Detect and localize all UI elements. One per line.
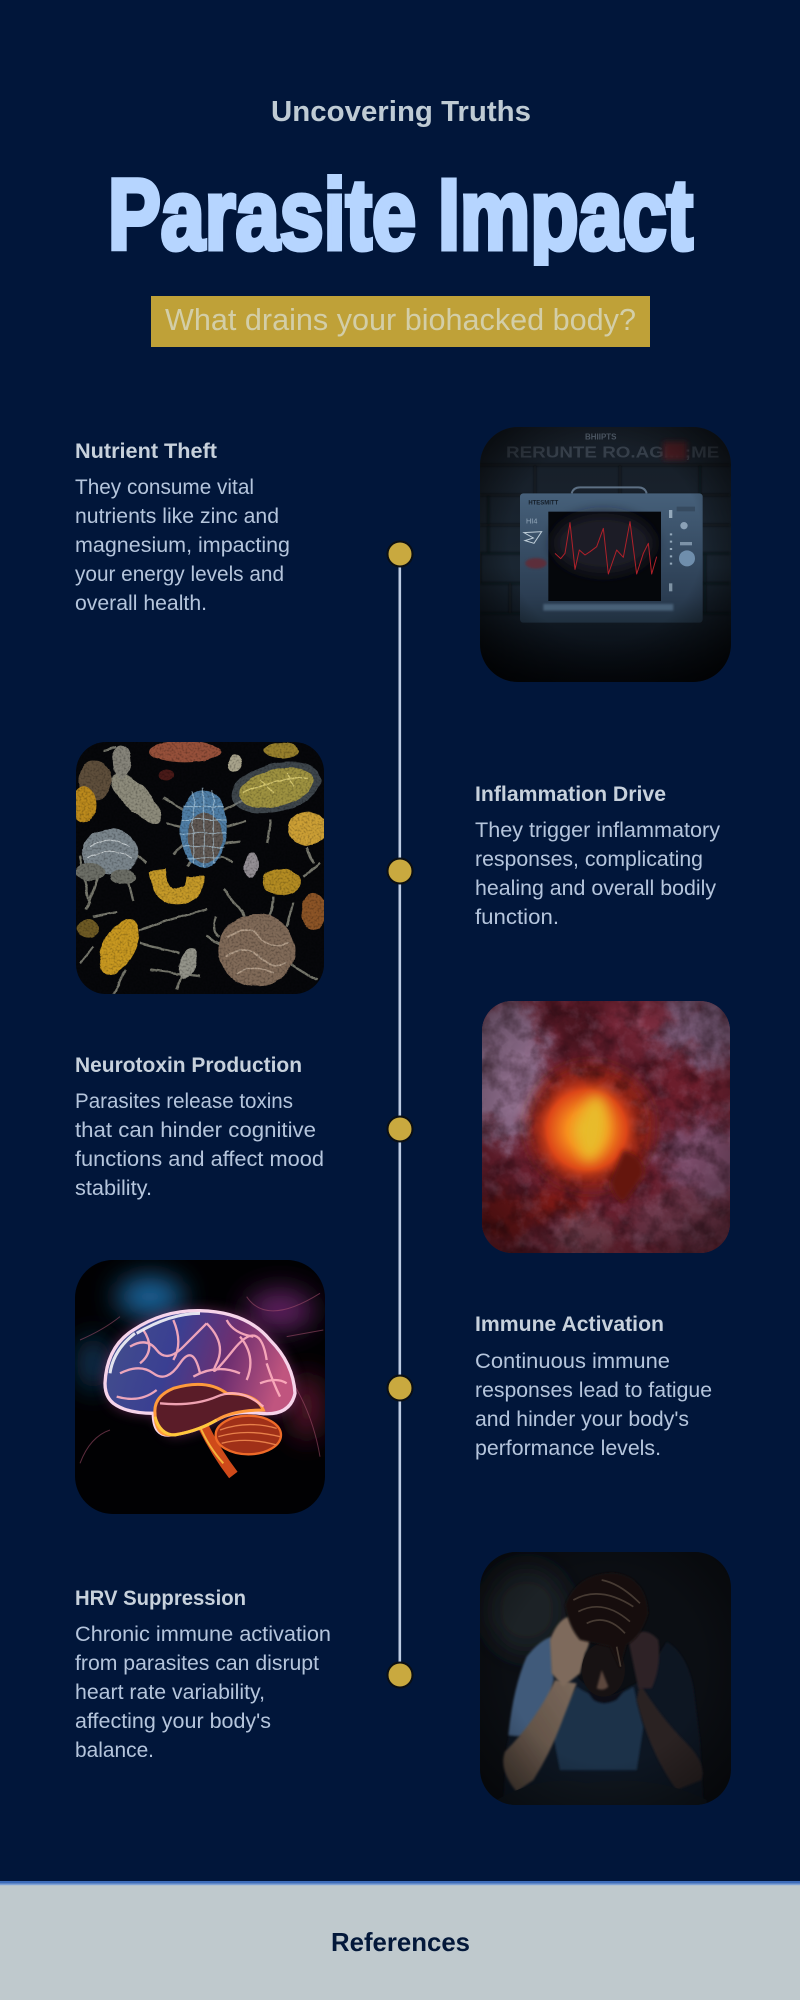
text block: Nutrient Theft: Nutrient Theft <box>75 440 217 463</box>
text block: HRV Suppression: affecting your body's <box>75 1710 271 1733</box>
eyebrow heading: Uncovering Truths <box>271 96 531 128</box>
timeline dot 2 <box>388 858 412 884</box>
cerebellum <box>216 1416 281 1454</box>
text block: Immune Activation: performance levels. <box>475 1437 661 1460</box>
text block: Neurotoxin Production: that can hinder cognitive <box>75 1119 316 1142</box>
dark folds <box>610 1150 644 1203</box>
text block: Neurotoxin Production: functions and affect mood <box>75 1148 324 1171</box>
text block: HRV Suppression: balance. <box>75 1739 154 1762</box>
text block: Inflammation Drive: Inflammation Drive <box>475 783 666 806</box>
monitor body <box>520 487 703 623</box>
timeline <box>388 542 412 1688</box>
text block: Inflammation Drive: function. <box>475 906 559 929</box>
text block: Nutrient Theft: They consume vital <box>75 476 254 499</box>
red crater <box>527 1063 653 1190</box>
yellow arch parasite <box>157 870 195 897</box>
timeline dot 4 <box>388 1376 412 1400</box>
brown parasite <box>78 760 112 800</box>
text block: Inflammation Drive: healing and overall bodily <box>475 877 717 900</box>
yellow-green parasite <box>232 762 322 814</box>
yellow parasite lower left <box>100 918 140 975</box>
grey spider parasite <box>76 829 138 885</box>
image: microscopic parasites <box>72 741 328 994</box>
brain stem <box>203 1427 233 1475</box>
large brown parasite <box>218 914 295 986</box>
text block: Immune Activation: and hinder your body's <box>475 1408 689 1431</box>
header <box>108 96 693 347</box>
text block: Nutrient Theft: magnesium, impacting <box>75 534 290 557</box>
image: inflamed tissue <box>482 1001 730 1253</box>
text block: HRV Suppression: from parasites can disrupt <box>75 1652 319 1675</box>
orange parasite right <box>301 893 326 930</box>
text block: Inflammation Drive: They trigger inflammatory <box>475 819 721 842</box>
text block: HRV Suppression <box>75 1587 331 1762</box>
image: distressed man <box>480 1552 731 1807</box>
text block: Neurotoxin Production: stability. <box>75 1177 152 1200</box>
in-image sign text: RERUNTE RO.AGM ;ME <box>506 444 719 461</box>
text block: Immune Activation: responses lead to fatigue <box>475 1379 712 1402</box>
brain folds <box>117 1320 287 1407</box>
pale parasite <box>111 774 162 824</box>
text block: Inflammation Drive <box>475 783 721 929</box>
nebula glow <box>77 1277 323 1463</box>
in-image sign text <box>506 432 719 461</box>
ECG trace <box>555 522 657 574</box>
monitor body: HTESMITT <box>528 500 559 506</box>
background haze <box>487 1567 567 1653</box>
parasite legs <box>80 747 320 993</box>
text block: Inflammation Drive: responses, complicating <box>475 848 703 871</box>
blue parasite <box>180 787 227 868</box>
subtitle banner: What drains your biohacked body? <box>165 302 636 337</box>
cerebrum <box>105 1311 295 1435</box>
text block: Neurotoxin Production <box>75 1054 324 1200</box>
references heading: References <box>331 1927 470 1957</box>
text block: Immune Activation: Immune Activation <box>475 1313 664 1336</box>
left hand <box>550 1616 590 1687</box>
image: heart monitor <box>480 427 731 682</box>
text block: Neurotoxin Production: Neurotoxin Production <box>75 1054 302 1077</box>
pale tissue clouds <box>482 1001 730 1253</box>
brain glow <box>105 1311 295 1435</box>
text block: Nutrient Theft: overall health. <box>75 592 207 615</box>
text block: Immune Activation: Continuous immune <box>475 1350 670 1373</box>
yellow parasite mid right <box>262 868 301 895</box>
text block: Immune Activation <box>475 1313 712 1460</box>
timeline dot 5 <box>388 1662 412 1688</box>
glowing core <box>530 1073 643 1187</box>
top orange parasite <box>149 741 221 762</box>
text block: HRV Suppression: HRV Suppression <box>75 1587 246 1610</box>
yellow cluster left <box>76 786 96 822</box>
text block: Neurotoxin Production: Parasites release toxins <box>75 1090 293 1113</box>
references footer <box>0 1881 800 2000</box>
text block: Nutrient Theft <box>75 440 290 615</box>
subtitle banner <box>151 296 650 347</box>
timeline dot 3 <box>388 1116 412 1142</box>
face shadow <box>582 1643 625 1697</box>
text block: Nutrient Theft: nutrients like zinc and <box>75 505 279 528</box>
text block: Nutrient Theft: your energy levels and <box>75 563 284 586</box>
temporal lobe <box>155 1384 263 1435</box>
in-image sign text: BHIIPTS <box>585 432 617 441</box>
text block: HRV Suppression: Chronic immune activation <box>75 1623 331 1646</box>
left forearm <box>503 1680 577 1792</box>
right forearm <box>637 1683 703 1790</box>
yellow oval right <box>288 812 328 845</box>
hair <box>565 1573 648 1668</box>
legs <box>497 1781 707 1807</box>
text block: HRV Suppression: heart rate variability, <box>75 1681 265 1704</box>
image: glowing brain <box>75 1260 325 1514</box>
torso <box>503 1637 703 1800</box>
right hand <box>628 1632 659 1688</box>
monitor body: HI4 <box>526 516 537 525</box>
timeline dot 1 <box>388 542 412 566</box>
